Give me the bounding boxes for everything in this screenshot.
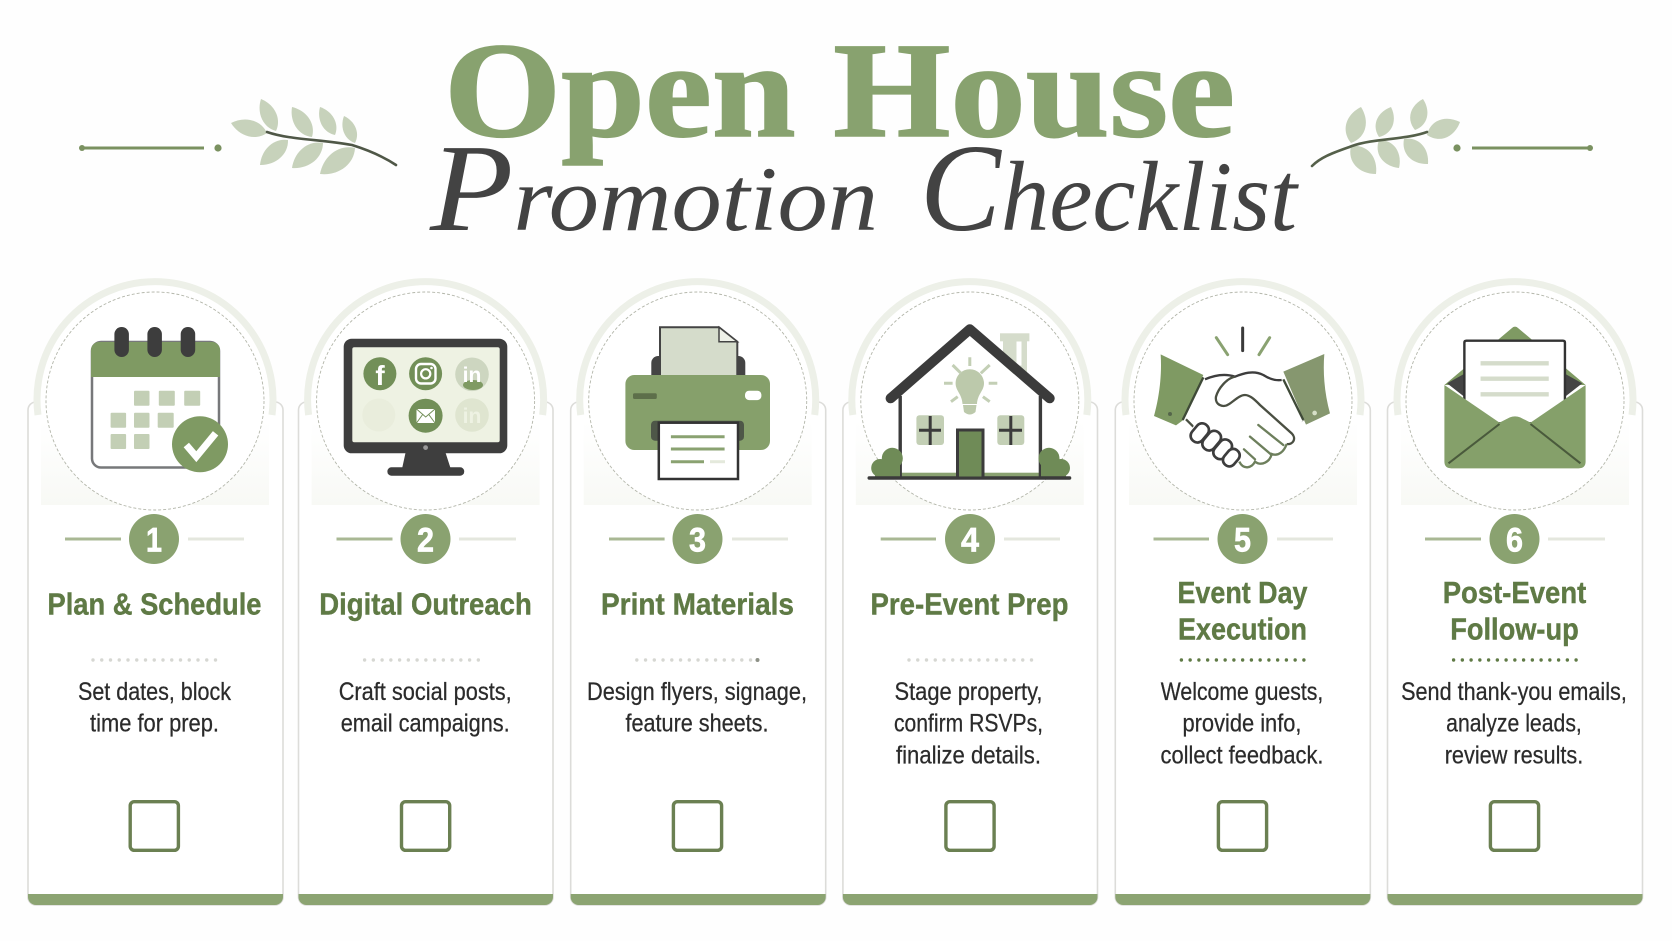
bottom bar (1388, 894, 1642, 905)
description: confirm RSVPs, (894, 711, 1043, 738)
divider with number 3: 3 (689, 522, 706, 560)
decoration: left branch and line (79, 96, 396, 182)
divider with number 3 (609, 514, 788, 564)
bottom bar (843, 894, 1098, 905)
divider with number 6 (1425, 514, 1605, 564)
bottom bar (298, 894, 553, 905)
heading: Execution (1178, 612, 1307, 646)
heading: Post-Event (1443, 575, 1586, 610)
checkbox (673, 802, 722, 850)
description: review results. (1445, 742, 1583, 769)
checkbox (946, 802, 994, 850)
description (1401, 679, 1627, 769)
description: Design flyers, signage, (587, 679, 807, 706)
description (587, 679, 807, 738)
heading (1443, 575, 1586, 646)
description: time for prep. (90, 711, 219, 738)
icon: calendar with check (91, 327, 228, 472)
panel: step 2 Digital Outreach (298, 278, 553, 905)
divider with number 4: 4 (961, 522, 979, 560)
icon: monitor with social media: f (375, 360, 385, 391)
divider with number 5: 5 (1234, 522, 1251, 560)
icon: open envelope with letter (1444, 327, 1586, 468)
description: finalize details. (896, 742, 1041, 769)
description: email campaigns. (341, 711, 510, 738)
heading: Pre-Event Prep (870, 586, 1068, 622)
subtitle: Promotion Checklist (429, 120, 1299, 258)
title: Open House: Open House (444, 16, 1235, 166)
description: Craft social posts, (339, 679, 512, 706)
checkbox (1490, 802, 1539, 850)
description (1160, 679, 1324, 769)
checkbox (1218, 802, 1267, 850)
icon: monitor with social media: in (463, 405, 481, 428)
divider with number 1: 1 (146, 522, 162, 560)
description: Set dates, block (78, 679, 232, 706)
heading: Event Day (1178, 575, 1308, 610)
divider with number 6: 6 (1506, 522, 1523, 560)
description: collect feedback. (1160, 742, 1324, 769)
icon: house with light bulb (869, 329, 1070, 478)
bottom bar (1115, 894, 1370, 905)
heading (1178, 575, 1308, 646)
divider with number 2: 2 (417, 522, 434, 560)
icon: handshake (1154, 328, 1330, 469)
description: analyze leads, (1446, 711, 1582, 738)
icon: printer (625, 327, 770, 479)
heading: Print Materials (601, 586, 794, 622)
checkbox (402, 802, 450, 850)
icon: monitor with social media: in (463, 364, 481, 387)
description: Welcome guests, (1161, 679, 1323, 706)
description (894, 679, 1043, 769)
divider with number 4 (881, 514, 1060, 564)
checkbox (130, 802, 178, 850)
subtitle: Promotion Checklist: Checklist (920, 120, 1299, 258)
heading: Plan & Schedule (48, 586, 262, 622)
heading: Digital Outreach (319, 586, 532, 622)
icon: monitor with social media (344, 339, 507, 476)
bottom bar (571, 894, 826, 905)
panel: step 5 Event Day Execution (1115, 278, 1370, 905)
panel: step 6 Post-Event Follow-up (1388, 278, 1642, 905)
heading: Follow-up (1450, 612, 1579, 646)
decoration: right branch and line (1312, 97, 1593, 181)
divider with number 1 (65, 514, 244, 564)
description (339, 679, 512, 738)
description: Stage property, (894, 679, 1042, 706)
description: provide info, (1182, 711, 1302, 738)
panel: step 3 Print Materials (571, 278, 826, 905)
bottom bar (28, 894, 283, 905)
panel: step 4 Pre-Event Prep (843, 278, 1098, 905)
divider with number 2 (336, 514, 516, 564)
panel: step 1 Plan & Schedule (28, 278, 283, 905)
description: feature sheets. (626, 711, 768, 738)
description (78, 679, 232, 738)
divider with number 5 (1154, 514, 1333, 564)
subtitle: Promotion Checklist: Promotion (429, 120, 878, 258)
description: Send thank-you emails, (1401, 679, 1627, 706)
